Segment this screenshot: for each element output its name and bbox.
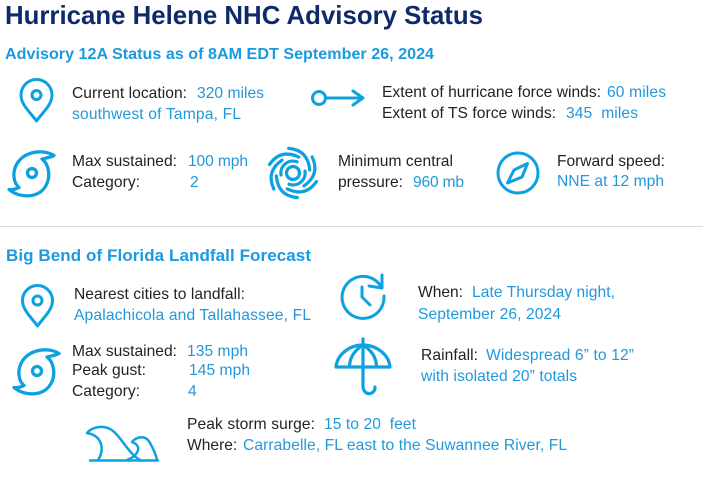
text: current location: southwest of Tampa, FL [72, 106, 241, 123]
icon: cyclone spiral [263, 146, 323, 200]
text: forecast intensity [72, 343, 250, 400]
icon: wind extent arrow [312, 91, 363, 105]
text: wind extent: 60 miles [607, 84, 666, 101]
text: forward speed [557, 153, 665, 190]
text: max sustained [72, 153, 248, 191]
text: rainfall: Rainfall: [421, 347, 478, 364]
text: when: When: [418, 284, 463, 301]
text: minimum central pressure: Minimum central [338, 153, 453, 170]
text: minimum central pressure: 960 mb [413, 174, 464, 191]
text: nearest cities [74, 286, 311, 324]
text: wind extent: Extent of hurricane force winds: [382, 84, 601, 101]
text: rainfall: Widespread 6” to 12” [486, 347, 634, 364]
text: when: September 26, 2024 [418, 306, 561, 323]
text: when: Late Thursday night, [472, 284, 615, 301]
heading: advisory status: Advisory 12A Status as of 8AM EDT September 26, 2024 [5, 45, 434, 63]
icon: clock [342, 275, 384, 318]
text: forecast intensity: Max sustained: [72, 343, 177, 360]
heading: landfall forecast: Big Bend of Florida Landfall Forecast [6, 246, 311, 265]
text: nearest cities: Nearest cities to landfall: [74, 286, 245, 303]
text: max sustained: Max sustained: [72, 153, 177, 170]
text: storm surge: Peak storm surge: [187, 416, 315, 433]
text: wind extent: Extent of TS force winds: [382, 105, 556, 122]
text: forecast intensity: Peak gust: [72, 362, 146, 379]
text: forecast intensity: 145 mph [189, 362, 250, 379]
icon: landfall pin [22, 286, 52, 326]
text: current location: Current location: [72, 85, 187, 102]
text: forecast intensity: 4 [188, 383, 197, 400]
icon: compass [498, 153, 538, 193]
text: forecast intensity: Category: [72, 383, 140, 400]
icon: hurricane symbol [9, 152, 54, 196]
text: wind extent [382, 84, 666, 122]
title: Hurricane Helene NHC Advisory Status [5, 2, 483, 30]
text: storm surge [187, 416, 567, 454]
text: max sustained: Category: [72, 174, 140, 191]
text: nearest cities: Apalachicola and Tallahassee, FL [74, 307, 311, 324]
text: rainfall [420, 347, 634, 385]
text: forecast intensity: 135 mph [187, 343, 248, 360]
text: rainfall: with isolated 20” totals [420, 368, 577, 385]
icon: storm surge waves [87, 427, 158, 460]
text: forward speed: Forward speed: [557, 153, 665, 170]
text: storm surge: 15 to 20 feet [324, 416, 417, 433]
text: forward speed: NNE at 12 mph [557, 173, 664, 190]
text: minimum central pressure [338, 153, 464, 191]
icon: location pin [21, 80, 52, 121]
text: when [418, 284, 615, 323]
text: storm surge: Carrabelle, FL east to the Suwannee River, FL [243, 437, 567, 454]
text: wind extent: 345 miles [566, 105, 638, 122]
icon: umbrella [336, 339, 390, 394]
text: current location [72, 85, 264, 123]
text: current location: 320 miles [197, 85, 264, 102]
text: storm surge: Where: [187, 437, 237, 454]
icon: hurricane forecast symbol [14, 350, 59, 394]
text: max sustained: 100 mph [188, 153, 248, 170]
divider [0, 226, 703, 227]
text: max sustained: 2 [190, 174, 199, 191]
text: minimum central pressure: pressure: [338, 174, 403, 191]
